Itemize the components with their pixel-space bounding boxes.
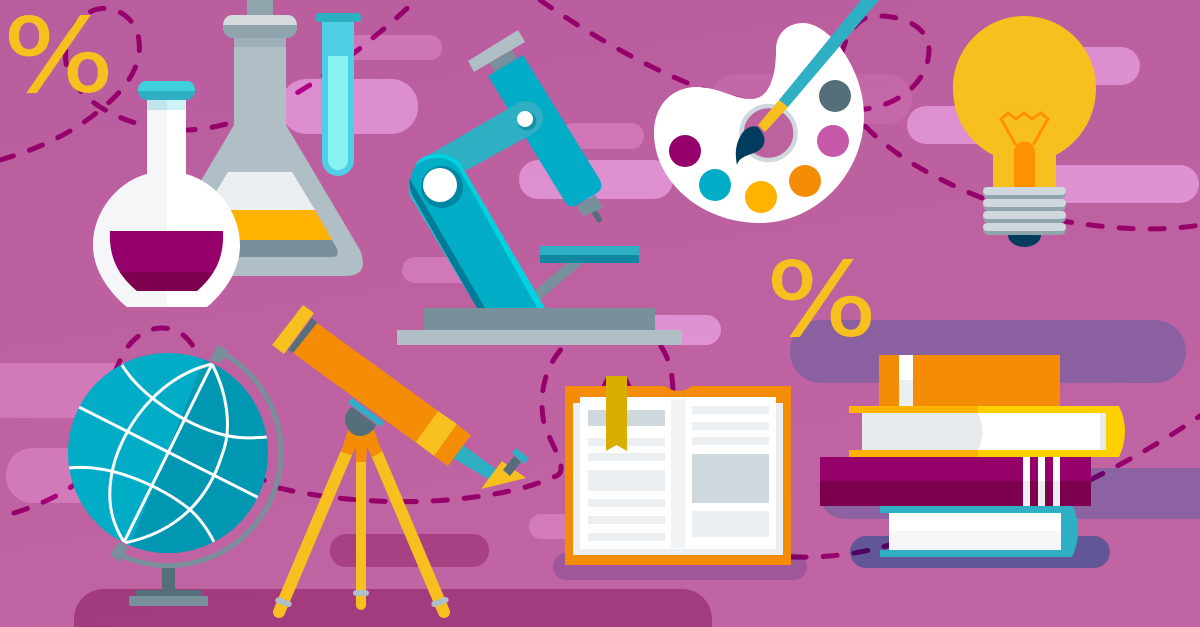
dark pills [74, 534, 712, 627]
percent sign right: % [766, 241, 877, 360]
icon: test tube [315, 13, 361, 176]
yellow book [849, 406, 1125, 457]
icon: open book [565, 376, 791, 565]
icon: erlenmeyer flask [157, 0, 363, 276]
purple book [820, 457, 1091, 506]
medium pills [0, 35, 644, 539]
dashed path: lower trail [14, 328, 1200, 557]
percent sign left: % [3, 0, 114, 116]
icon: stack of books [820, 355, 1125, 557]
faint pill [711, 74, 912, 124]
icon: microscope [397, 30, 682, 345]
icon: telescope [272, 305, 529, 612]
purple pills [790, 320, 1200, 519]
orange book [879, 355, 1060, 406]
deep purple pill [850, 536, 1110, 568]
book shadow pill [553, 553, 807, 580]
icon: paint palette [654, 0, 879, 223]
light pills [280, 47, 1199, 345]
icon: round flask [93, 81, 240, 307]
teal book [880, 506, 1078, 557]
icon: light bulb [953, 16, 1096, 247]
icon: globe [68, 340, 300, 606]
dashed path: upper trail [0, 0, 1200, 229]
